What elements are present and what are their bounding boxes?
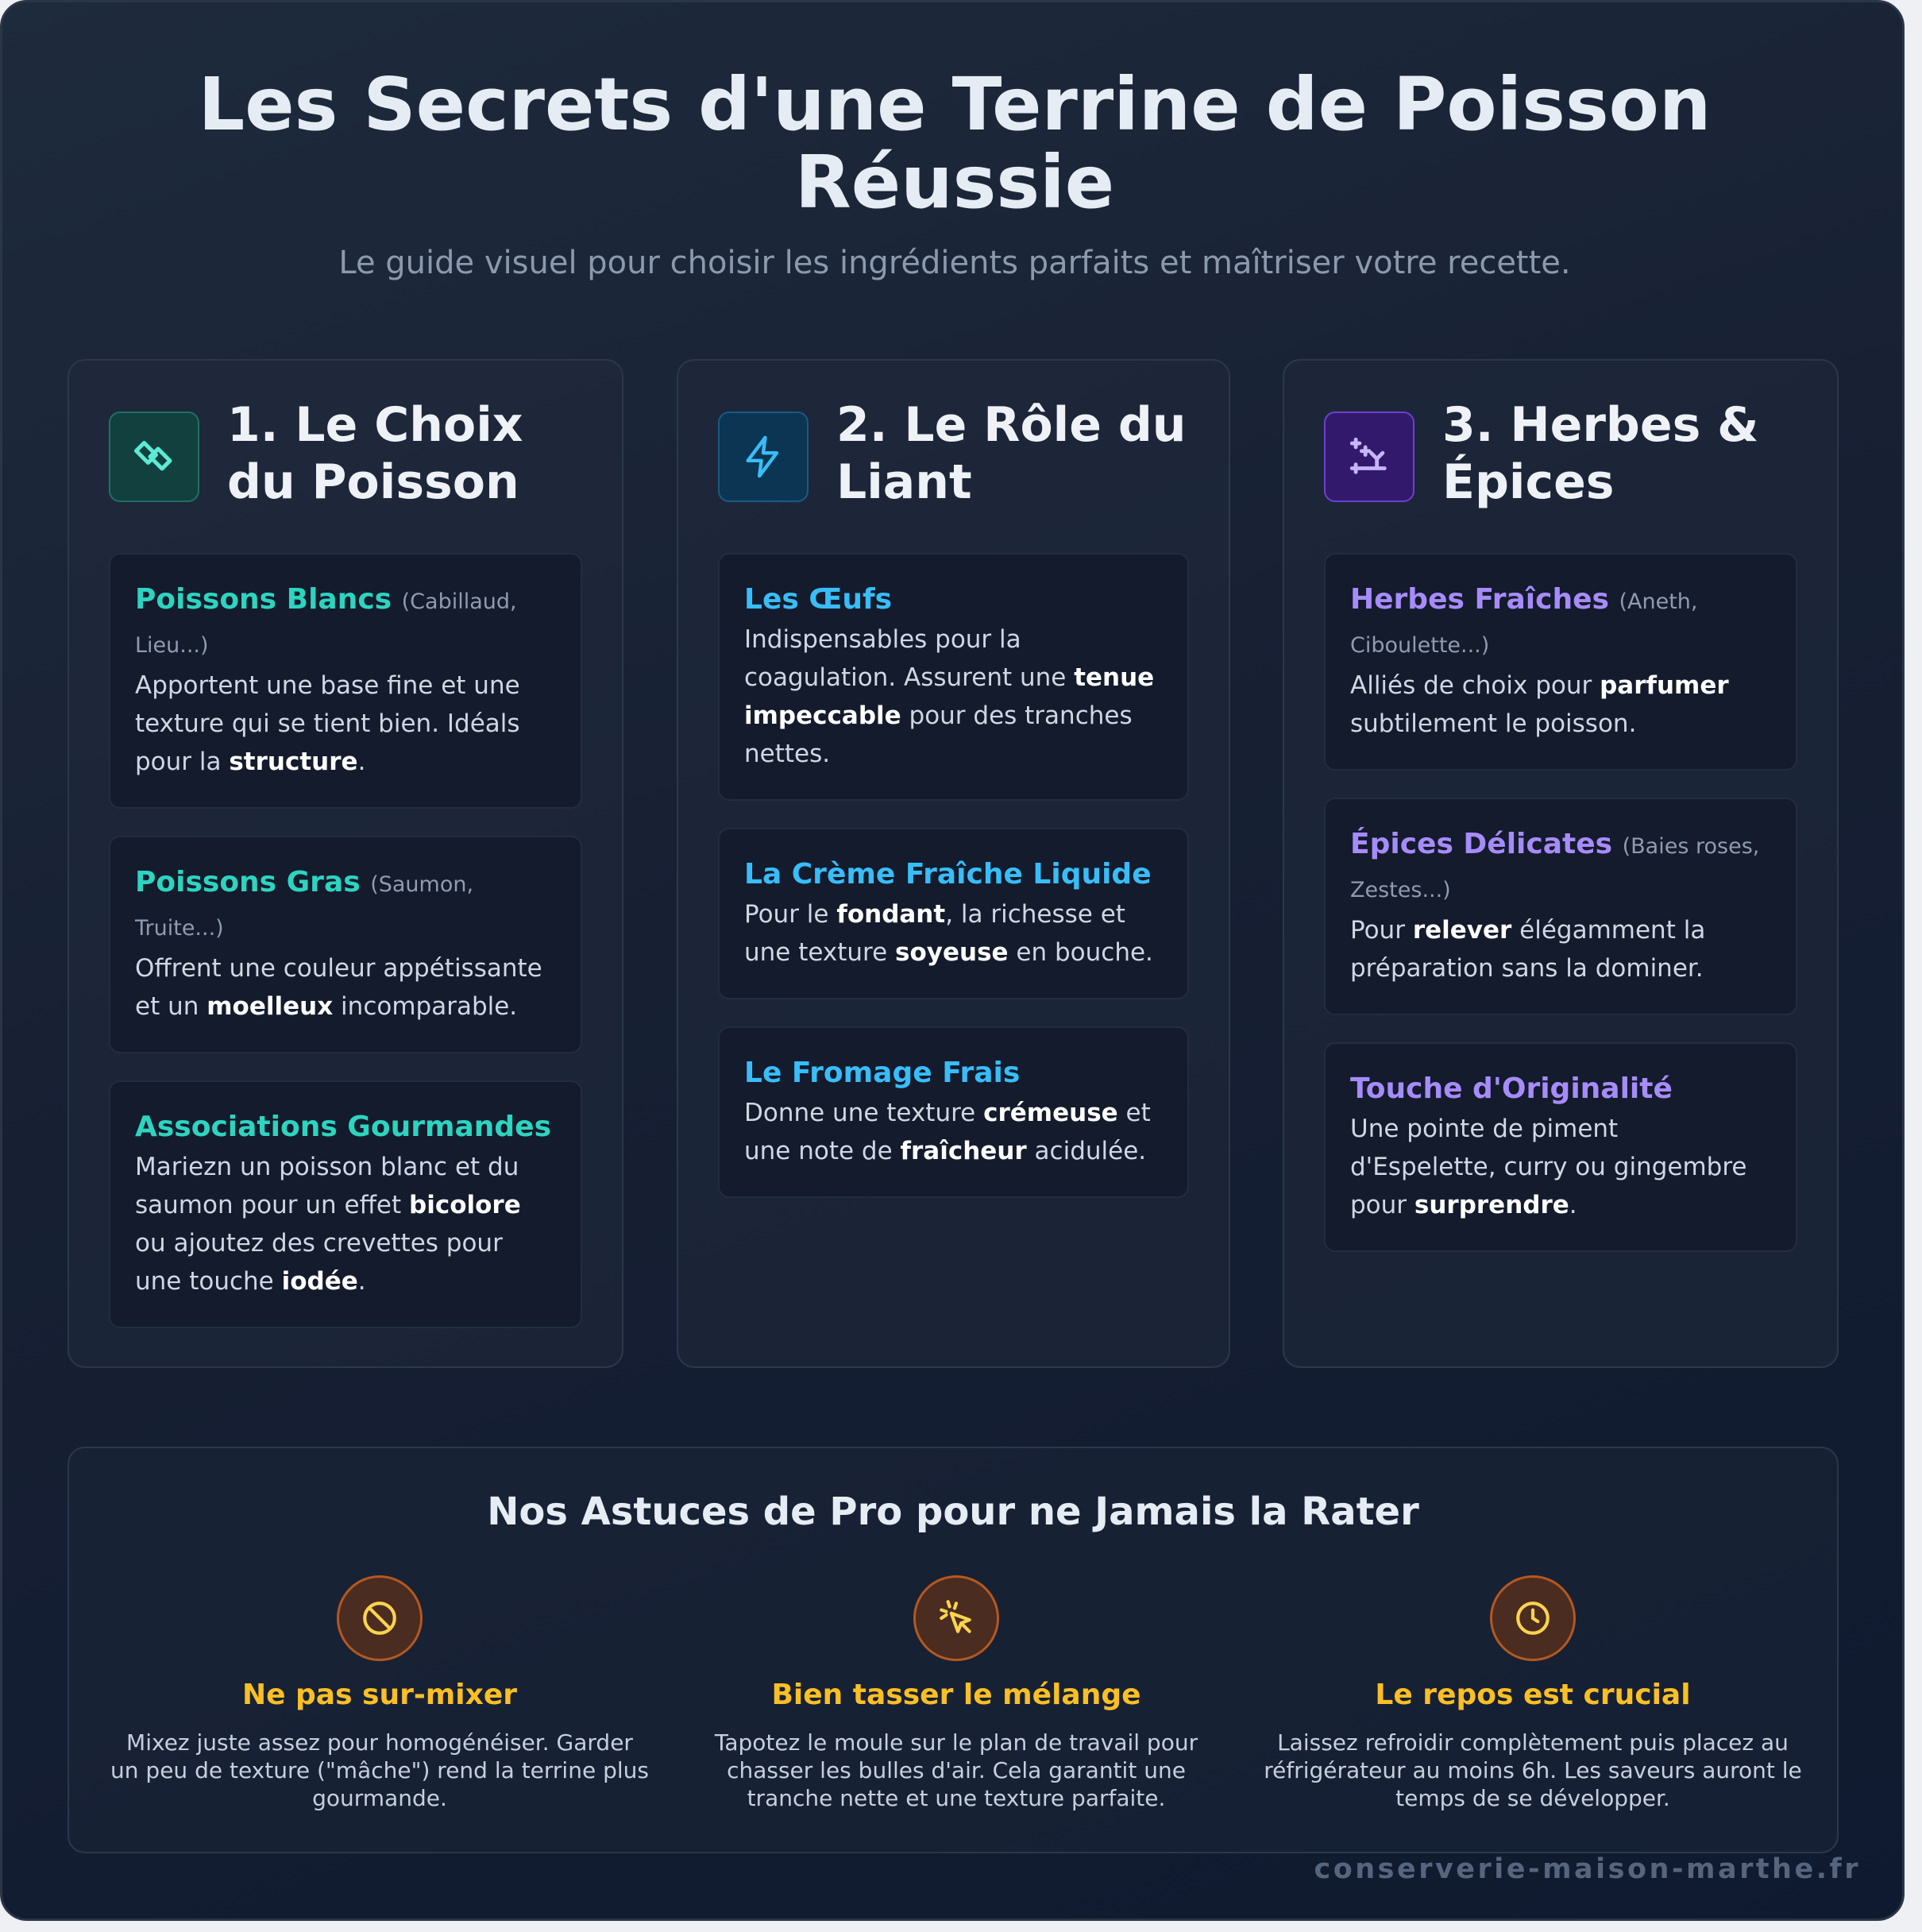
title: Les Secrets d'une Terrine de Poisson xyxy=(199,62,1711,147)
icon: ban xyxy=(337,1575,423,1661)
tip: repos: Laissez refroidir complètement puis placez au réfrigérateur au moins 6h. Les saveurs auront le temps de se développer. xyxy=(1264,1729,1802,1811)
card: oeufs xyxy=(718,553,1189,801)
card: epices: Pour relever élégamment la préparation sans la dominer. xyxy=(1350,916,1705,983)
footer url: conserverie-maison-marthe.fr xyxy=(1314,1853,1861,1885)
card: poissons blancs xyxy=(109,553,582,809)
tip: tasser xyxy=(715,1575,1198,1811)
card: poissons gras: Poissons Gras (Saumon, Truite...) xyxy=(135,866,473,941)
icon: fish xyxy=(109,412,199,502)
heading: choix du poisson: du Poisson xyxy=(227,454,519,510)
panel: herbes xyxy=(1283,359,1839,1368)
card: originalite xyxy=(1324,1042,1797,1252)
tip: tasser: Bien tasser le mélange xyxy=(771,1679,1141,1711)
tip: repos xyxy=(1264,1575,1802,1811)
card: poissons blancs: Poissons Blancs (Cabillaud, Lieu...) xyxy=(135,583,517,658)
card: epices: Épices Délicates (Baies roses, Zestes...) xyxy=(1350,828,1759,902)
icon: lightning xyxy=(718,412,809,502)
heading: liant: 2. Le Rôle du xyxy=(836,397,1186,453)
card: herbes fraiches xyxy=(1324,553,1797,771)
heading: herbes: 3. Herbes & xyxy=(1442,397,1758,453)
card: associations: Associations Gourmandes xyxy=(135,1111,551,1143)
card: associations: Mariezn un poisson blanc et du saumon pour un effet bicolore ou ajoutez des crevettes pour une touche iodée. xyxy=(135,1153,521,1296)
icon: click xyxy=(913,1575,999,1661)
card: creme xyxy=(718,828,1189,999)
panel: choix du poisson xyxy=(68,359,623,1368)
heading: choix du poisson xyxy=(109,397,523,510)
card: originalite: Touche d'Originalité xyxy=(1350,1072,1673,1105)
title: Réussie xyxy=(795,140,1114,225)
tip: sur-mixer: Mixez juste assez pour homogénéiser. Garder un peu de texture ("mâche") rend la terrine plus gourmande. xyxy=(110,1729,649,1811)
icon: sparkles xyxy=(1324,412,1414,502)
card: epices xyxy=(1324,798,1797,1015)
card: creme: La Crème Fraîche Liquide xyxy=(744,858,1152,891)
card: fromage: Donne une texture crémeuse et une note de fraîcheur acidulée. xyxy=(744,1099,1151,1165)
tip: sur-mixer xyxy=(110,1575,649,1811)
tip: tasser: Tapotez le moule sur le plan de travail pour chasser les bulles d'air. Cela garantit une tranche nette et une texture parfaite. xyxy=(715,1729,1198,1811)
title xyxy=(199,62,1711,225)
heading: liant: Liant xyxy=(836,454,972,510)
card: poissons blancs: Apportent une base fine et une texture qui se tient bien. Idéals pour la structure. xyxy=(135,671,520,776)
card: herbes fraiches: Herbes Fraîches (Aneth, Ciboulette...) xyxy=(1350,583,1697,658)
card: poissons gras xyxy=(109,836,582,1053)
card: oeufs: Les Œufs xyxy=(744,583,892,616)
panel: astuces xyxy=(68,1447,1839,1853)
subtitle: Le guide visuel pour choisir les ingrédients parfaits et maîtriser votre recette. xyxy=(338,245,1571,281)
heading: liant xyxy=(718,397,1186,510)
heading: choix du poisson: 1. Le Choix xyxy=(227,397,523,453)
heading: astuces: Nos Astuces de Pro pour ne Jamais la Rater xyxy=(487,1490,1419,1534)
icon: clock xyxy=(1490,1575,1576,1661)
heading: herbes xyxy=(1324,397,1758,510)
card: fromage xyxy=(718,1026,1189,1198)
card: poissons gras: Offrent une couleur appétissante et un moelleux incomparable. xyxy=(135,954,542,1021)
card: creme: Pour le fondant, la richesse et une texture soyeuse en bouche. xyxy=(744,900,1153,967)
card: originalite: Une pointe de piment d'Espelette, curry ou gingembre pour surprendre. xyxy=(1350,1115,1746,1219)
card: associations xyxy=(109,1080,582,1328)
card: herbes fraiches: Alliés de choix pour parfumer subtilement le poisson. xyxy=(1350,671,1729,738)
card: fromage: Le Fromage Frais xyxy=(744,1057,1020,1089)
panel: liant xyxy=(677,359,1230,1368)
heading: herbes: Épices xyxy=(1442,454,1614,510)
tip: repos: Le repos est crucial xyxy=(1375,1679,1691,1711)
card: oeufs: Indispensables pour la coagulation. Assurent une tenue impeccable pour des tranches nettes. xyxy=(744,625,1154,768)
tip: sur-mixer: Ne pas sur-mixer xyxy=(242,1679,517,1711)
